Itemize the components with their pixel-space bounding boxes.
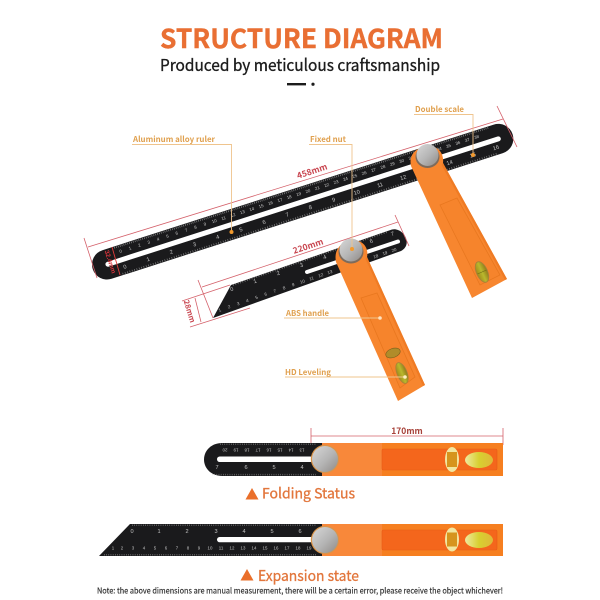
long aluminum ruler: 0 [119, 248, 123, 254]
level vial on upper handle [473, 260, 491, 284]
subtitle: Produced by meticulous craftsmanship [160, 52, 440, 76]
458mm dimension: 458mm [295, 161, 329, 182]
long aluminum ruler: 1 [146, 257, 151, 263]
long aluminum ruler: 6 [262, 220, 267, 226]
expanded tool: 17 [285, 546, 290, 550]
expanded tool: 0 [130, 529, 134, 535]
short aluminum ruler: 10 [299, 278, 306, 285]
folded tool: 7 [215, 465, 219, 471]
long aluminum ruler: 4 [156, 236, 161, 242]
long aluminum ruler: 13 [423, 167, 431, 175]
long aluminum ruler: 17 [277, 197, 283, 203]
expanded tool: 18 [296, 546, 301, 550]
label: Double scale [414, 104, 475, 157]
expanded tool: 14 [252, 546, 257, 550]
short aluminum ruler: 0 [230, 287, 234, 293]
short aluminum ruler: 6 [369, 239, 374, 245]
expanded tool: 9 [198, 546, 201, 550]
long aluminum ruler: 10 [211, 218, 218, 224]
folded nut [311, 445, 339, 473]
long aluminum ruler: 2 [169, 249, 174, 256]
level vial vertical [393, 361, 411, 385]
expanded tool: 13 [241, 546, 246, 550]
long aluminum ruler: 1 [128, 245, 132, 251]
short aluminum ruler: 2 [227, 304, 231, 310]
long aluminum ruler: 19 [296, 191, 302, 197]
long aluminum ruler: 36 [455, 140, 461, 146]
folded orange handle [322, 443, 503, 476]
long aluminum ruler: 22 [324, 182, 330, 188]
folded tool [204, 443, 503, 476]
long aluminum ruler: 2 [137, 242, 142, 248]
fixed nut upper [416, 144, 440, 168]
long aluminum ruler: 25 [352, 173, 358, 179]
long aluminum ruler: 35 [445, 143, 452, 149]
short aluminum ruler: 7 [390, 231, 395, 238]
expanded tool: 8 [187, 546, 190, 550]
long aluminum ruler: 18 [286, 194, 293, 200]
short aluminum ruler: 1 [218, 307, 222, 313]
short aluminum ruler: 8 [282, 285, 287, 291]
level vial horizontal [384, 346, 402, 360]
short aluminum ruler: 5 [255, 294, 259, 300]
long aluminum ruler: 38 [473, 134, 480, 140]
label: HD Leveling [285, 367, 407, 379]
long aluminum ruler: 3 [147, 239, 151, 245]
ABS handle upper [411, 146, 507, 298]
expanded tool: 16 [274, 546, 279, 550]
caption: Expansion state: Expansion state [258, 565, 359, 586]
expanded tool: 3 [214, 529, 218, 535]
folded tool: 6 [244, 465, 248, 471]
folded tool: 15 [277, 448, 282, 452]
short aluminum ruler: 18 [373, 253, 379, 259]
label: Fixed nut [309, 134, 354, 251]
expanded tool: 15 [263, 546, 268, 550]
expanded tool: 19 [307, 546, 312, 550]
expanded tool: 4 [242, 529, 246, 535]
note: Note: the above dimensions are manual measurement, there will be a certain error, please receive the object whichever! [97, 586, 503, 596]
long aluminum ruler: 30 [399, 158, 405, 164]
long aluminum ruler: 7 [285, 212, 290, 219]
long aluminum ruler: 31 [408, 155, 415, 161]
folded tool: 18 [244, 448, 249, 452]
long aluminum ruler [88, 120, 517, 283]
long aluminum ruler: 37 [464, 137, 471, 143]
label: Double scale: Double scale [415, 104, 464, 115]
label: HD Leveling: HD Leveling [285, 367, 331, 378]
long aluminum ruler: 0 [123, 264, 128, 271]
label: ABS handle [284, 308, 382, 320]
long aluminum ruler: 23 [333, 179, 340, 185]
expanded tool: 5 [270, 529, 274, 535]
expanded tool: 6 [298, 529, 302, 535]
long aluminum ruler: 20 [305, 188, 312, 194]
short aluminum ruler: 7 [273, 288, 277, 294]
expanded tool: 11 [219, 546, 224, 550]
long aluminum ruler: 7 [184, 227, 189, 233]
long aluminum ruler: 15 [469, 152, 477, 160]
title: STRUCTURE DIAGRAM [160, 19, 443, 56]
220mm dimension [198, 215, 409, 318]
expanded tool: 1 [112, 546, 115, 550]
folded tool: 16 [266, 448, 271, 452]
short aluminum ruler: 4 [323, 255, 327, 261]
long aluminum ruler: 12 [230, 212, 237, 218]
long aluminum ruler: 13 [239, 209, 246, 215]
expanded tool: 7 [176, 546, 179, 550]
32mm dimension: 32.4mm [103, 249, 117, 275]
expanded nut [311, 526, 339, 554]
long aluminum ruler: 6 [175, 230, 179, 236]
folded tool: 4 [300, 465, 304, 471]
expanded tool: 6 [165, 546, 168, 550]
long aluminum ruler: 8 [308, 205, 313, 211]
short aluminum ruler: 6 [264, 291, 268, 297]
short aluminum ruler: 11 [309, 275, 315, 282]
expanded tool: 10 [208, 546, 213, 550]
long aluminum ruler: 5 [166, 233, 170, 239]
short aluminum ruler: 3 [236, 301, 241, 306]
long aluminum ruler: 15 [258, 203, 265, 209]
folded tool: 13 [299, 448, 304, 452]
long aluminum ruler: 16 [267, 200, 274, 206]
28mm dimension: 28mm [181, 299, 198, 324]
expanded tool: 12 [230, 546, 235, 550]
short aluminum ruler: 13 [327, 269, 334, 275]
short aluminum ruler: 9 [291, 282, 296, 287]
short aluminum ruler: 1 [253, 279, 258, 285]
short aluminum ruler: 3 [299, 263, 304, 269]
short aluminum ruler: 12 [318, 272, 324, 278]
expanded tool: 1 [157, 529, 161, 535]
long aluminum ruler: 14 [249, 206, 255, 212]
long aluminum ruler: 28 [380, 164, 387, 170]
short aluminum ruler: 20 [391, 247, 398, 253]
label: Fixed nut: Fixed nut [310, 134, 347, 145]
expanded tool: 3 [132, 546, 135, 550]
short aluminum ruler [212, 229, 407, 318]
long aluminum ruler: 3 [192, 242, 197, 249]
170mm dimension: 170mm [391, 425, 423, 437]
expanded tool [99, 524, 503, 556]
short aluminum ruler: 4 [245, 298, 250, 303]
28mm dimension [181, 285, 250, 327]
long aluminum ruler: 33 [427, 149, 433, 155]
long aluminum ruler: 16 [492, 145, 500, 152]
ABS handle lower [336, 240, 425, 401]
folded tool: 19 [233, 448, 238, 452]
expanded tool: 2 [121, 546, 124, 550]
expanded tool: 4 [143, 546, 146, 550]
long aluminum ruler: 21 [314, 185, 321, 191]
long aluminum ruler: 24 [342, 176, 349, 182]
long aluminum ruler: 14 [446, 160, 454, 167]
long aluminum ruler: 8 [194, 224, 198, 230]
label: Aluminum alloy ruler: Aluminum alloy ruler [132, 134, 216, 145]
long aluminum ruler: 27 [370, 167, 377, 173]
heading divider mark [287, 83, 315, 86]
long aluminum ruler: 12 [400, 174, 407, 182]
long aluminum ruler: 29 [389, 161, 396, 167]
expanded tool: 2 [185, 529, 189, 535]
long aluminum ruler: 34 [436, 146, 443, 152]
expanded orange handle [322, 524, 503, 556]
folded tool: 5 [272, 465, 276, 471]
long aluminum ruler: 11 [377, 182, 384, 189]
long aluminum ruler: 32 [417, 152, 424, 158]
220mm dimension: 220mm [291, 236, 325, 257]
short aluminum ruler: 19 [382, 250, 389, 256]
label: Aluminum alloy ruler [132, 134, 234, 234]
long aluminum ruler: 11 [221, 215, 227, 221]
caption: Folding Status: Folding Status [262, 482, 355, 504]
folded tool: 17 [255, 448, 260, 452]
long aluminum ruler: 26 [361, 170, 368, 176]
long aluminum ruler: 5 [239, 227, 244, 234]
fixed nut lower [338, 238, 364, 264]
long aluminum ruler: 9 [332, 197, 336, 204]
short aluminum ruler: 5 [346, 247, 351, 253]
short aluminum ruler: 2 [276, 271, 281, 277]
folded tool: 14 [288, 448, 293, 452]
folded tool: 20 [222, 448, 227, 452]
long aluminum ruler: 9 [203, 221, 207, 227]
label: ABS handle: ABS handle [285, 308, 329, 319]
long aluminum ruler: 4 [216, 234, 220, 241]
expanded tool: 5 [154, 546, 157, 550]
long aluminum ruler: 10 [353, 189, 361, 197]
458mm dimension [84, 106, 517, 278]
